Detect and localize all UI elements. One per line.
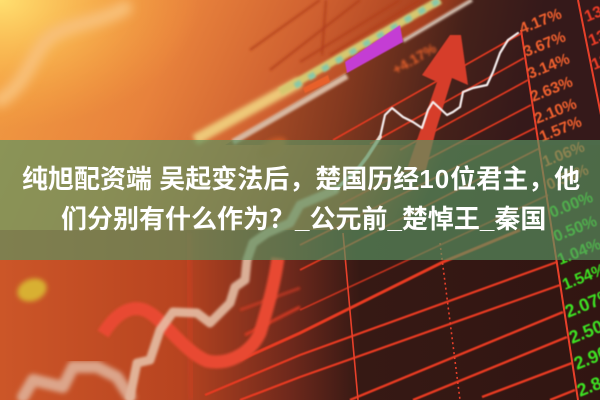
- diagonal stripes upper area: [250, 0, 420, 70]
- axis percentages: green: [547, 189, 600, 400]
- axis percentages: orange: 3.14%: [525, 50, 572, 83]
- axis percentages: orange: [517, 5, 591, 194]
- red swoosh: [103, 258, 278, 362]
- orange block: [303, 75, 330, 93]
- title: [22, 164, 580, 234]
- pale stripe: [233, 0, 472, 142]
- axis percentages: orange: 4.17%: [517, 5, 564, 38]
- right column numbers: [582, 3, 600, 74]
- axis percentages: green: 0.50%: [551, 213, 600, 246]
- vertical axis lines: [188, 0, 600, 400]
- title line 2: 们分别有什么作为？_公元前_楚悼王_秦国: [61, 204, 546, 234]
- icon: red block top centre blur: [254, 133, 290, 163]
- title line 1: 纯旭配资端 吴起变法后，楚国历经10位君主，他: [22, 164, 580, 194]
- chart label: +4.17%: +4.17%: [390, 40, 439, 78]
- axis percentages: orange: 1.06%: [540, 138, 587, 171]
- icon: blurred pale curve top left: [0, 8, 125, 100]
- axis percentages: orange: 0.58%: [544, 161, 591, 194]
- white trend line: [23, 33, 518, 397]
- axis percentages: green: 0.00%: [547, 189, 596, 222]
- icon: yellow blob: [14, 275, 50, 305]
- glowing beam: [195, 0, 440, 140]
- axis percentages: orange: 2.10%: [532, 95, 579, 128]
- axis percentages: orange: 3.67%: [521, 28, 568, 61]
- axis percentages: orange: 1.57%: [537, 113, 584, 146]
- translucent title band: [0, 140, 600, 260]
- magenta block: [345, 25, 403, 73]
- red grid lines: [205, 33, 575, 400]
- axis percentages: orange: 2.63%: [528, 73, 575, 106]
- red arrow: [406, 35, 468, 172]
